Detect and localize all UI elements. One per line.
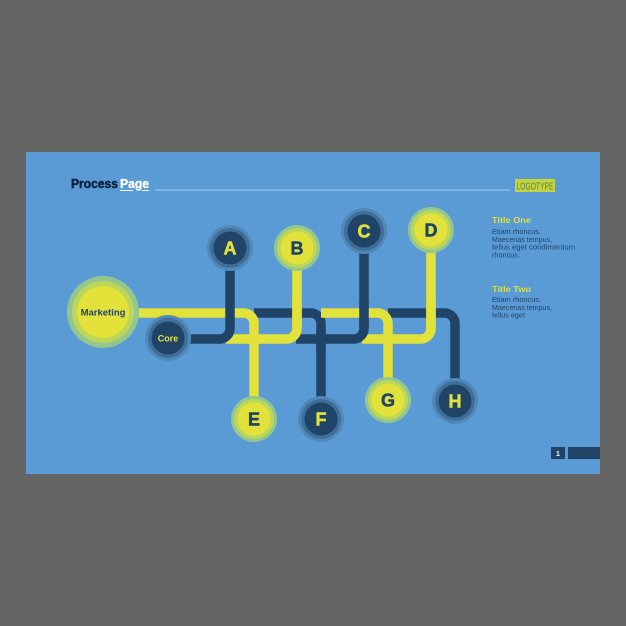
page number: 1 (556, 451, 560, 458)
line: navy to F (254, 313, 321, 419)
heading: Process Page (71, 177, 149, 191)
text block: Title One: tellus eget condimentum (492, 243, 575, 252)
line: navy to H (388, 313, 455, 401)
panel: slide background (26, 152, 600, 474)
node: C (341, 208, 387, 254)
line: navy Core to A (168, 248, 230, 339)
node: Marketing (67, 276, 139, 348)
logotype badge: LOGOTYPE (516, 182, 554, 192)
node: B: B (290, 238, 304, 258)
node: Core (145, 315, 191, 361)
node: H: H (448, 392, 462, 412)
text block: Title One (492, 215, 575, 259)
node: E (231, 396, 277, 442)
heading: Process Page: Process (71, 177, 118, 191)
text block: Title One: rhoncus. (492, 250, 520, 259)
text block: Title Two: tellus eget (492, 311, 526, 320)
line: yellow to G (321, 313, 388, 400)
text block: Title Two: Title Two (492, 284, 531, 294)
line: yellow Marketing to E (103, 313, 254, 419)
node: D: D (424, 220, 438, 240)
logotype badge (515, 179, 555, 192)
text block: Title One: Maecenas tempus, (492, 235, 552, 244)
upper crossings (297, 300, 431, 350)
node: G: G (381, 390, 395, 410)
node: A: A (224, 238, 236, 258)
text block: Title Two: Etiam rhoncus. (492, 295, 541, 304)
node: A (207, 225, 253, 271)
node: B (274, 225, 320, 271)
line: navy to C (296, 231, 364, 339)
line: yellow to B (226, 248, 297, 339)
node: G (365, 377, 411, 423)
text block: Title One: Title One (492, 215, 531, 225)
node: C: C (358, 222, 370, 242)
node: F (298, 396, 344, 442)
header rule (155, 190, 510, 191)
text block: Title Two (492, 284, 552, 320)
node: F: F (316, 410, 326, 430)
node: D (408, 207, 454, 253)
node: Marketing: Marketing (81, 308, 126, 318)
node: H (432, 378, 478, 424)
line: yellow to D (362, 230, 431, 339)
node: E: E (248, 410, 260, 430)
process lines network (103, 230, 455, 419)
text block: Title Two: Maecenas tempus, (492, 303, 552, 312)
node: Core: Core (158, 334, 178, 344)
page number (551, 447, 600, 459)
heading: Process Page: Page (120, 177, 149, 191)
text block: Title One: Etiam rhoncus. (492, 227, 541, 236)
